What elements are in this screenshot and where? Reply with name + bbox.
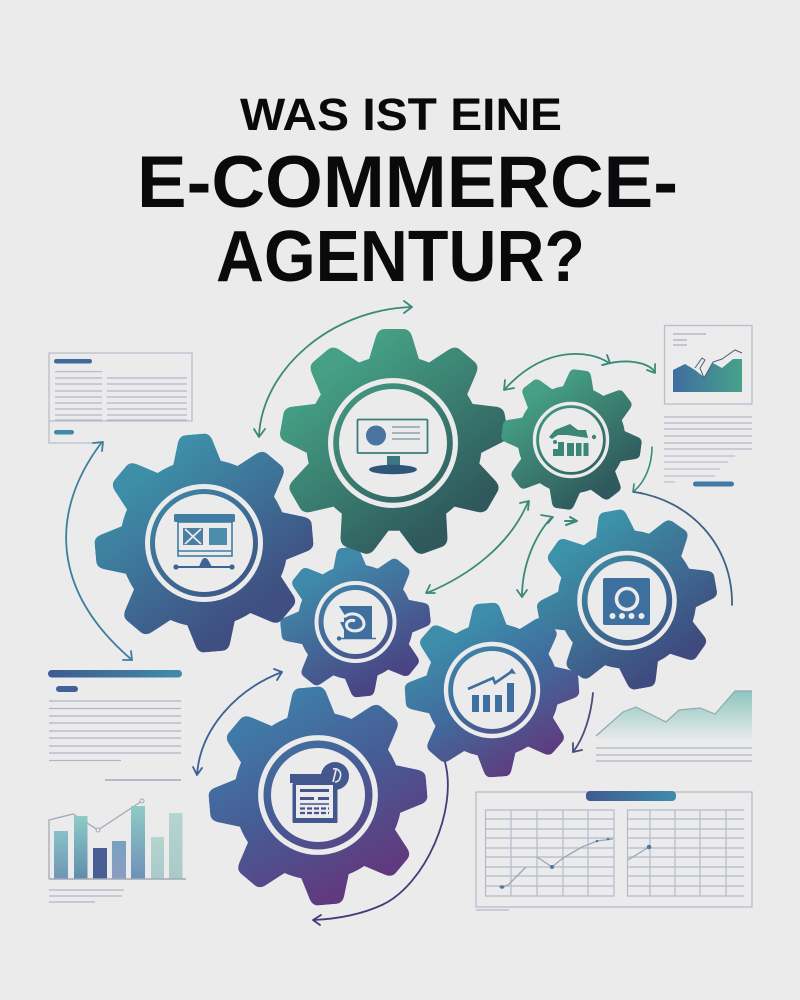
arrow: left teal xyxy=(66,442,132,660)
panel: document top left xyxy=(49,353,192,443)
icon: monitor xyxy=(358,420,428,474)
arrow: top green xyxy=(254,301,412,437)
arrow: small green xyxy=(565,517,577,525)
arrow: centre green diagonal xyxy=(426,501,529,593)
panel: text block left xyxy=(48,670,182,780)
gear: small green with house icon xyxy=(501,369,642,510)
panel: data tables bottom right xyxy=(476,791,752,910)
chart: bar chart bottom left xyxy=(49,799,186,902)
arrow: small gear to right gear xyxy=(633,447,652,493)
icon: presentation board xyxy=(173,514,235,570)
title xyxy=(137,89,678,297)
icon: dial panel xyxy=(603,578,650,625)
arrow: centre green vertical xyxy=(517,515,553,597)
arrow: right gear down xyxy=(573,693,593,752)
title line 2: E-COMMERCE- xyxy=(137,142,678,223)
title line 1: WAS IST EINE xyxy=(240,89,562,140)
gear: bottom with web form icon xyxy=(208,686,428,906)
icon: house and bars xyxy=(549,424,596,456)
icon: form with badge xyxy=(290,762,349,823)
gear: small centre blue with swirl icon xyxy=(280,548,431,698)
icon: growth chart xyxy=(468,668,516,712)
chart: area chart right xyxy=(596,691,752,761)
arrow: long right blue xyxy=(634,492,732,605)
arrow: top right pair xyxy=(504,354,655,390)
icon: swirl square xyxy=(337,606,376,641)
gear: large green with monitor icon xyxy=(280,329,506,554)
title line 3: AGENTUR? xyxy=(216,217,585,297)
gear: centre right with growth chart icon xyxy=(404,602,580,778)
panel: chart document top right xyxy=(664,326,752,486)
gear: right blue with dial icon xyxy=(537,510,717,690)
gear: left blue with presentation icon xyxy=(94,434,314,652)
arrow: bottom sweep xyxy=(313,762,448,925)
arrow: lower left loop xyxy=(193,669,282,775)
